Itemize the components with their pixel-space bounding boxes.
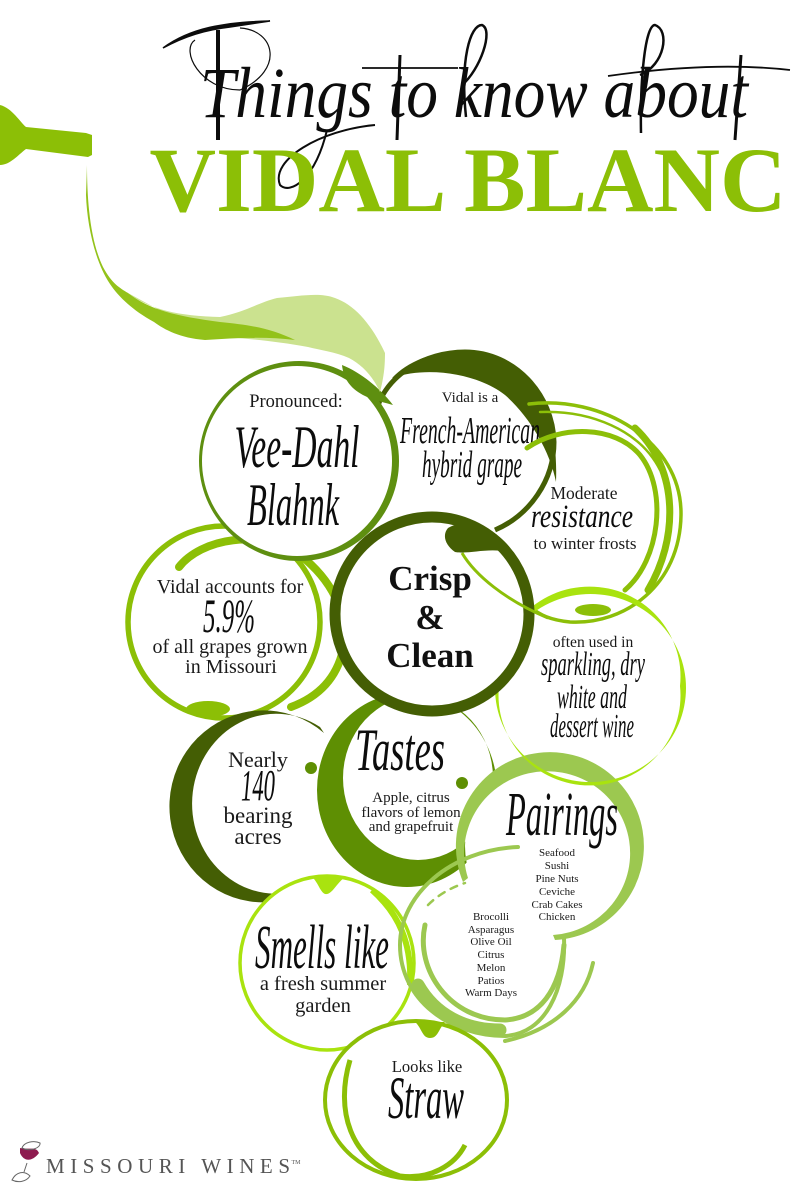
text: Asparagus (468, 924, 514, 936)
text: Sushi (545, 860, 569, 872)
panel: bearing acres (169, 710, 324, 902)
text: Pine Nuts (535, 873, 579, 885)
text: acres (234, 824, 282, 849)
panel: crisp and clean (335, 517, 548, 711)
ring arcs (527, 403, 681, 622)
outer arc (179, 540, 345, 707)
ring (169, 710, 324, 902)
text: and grapefruit (369, 819, 454, 835)
ring (495, 587, 686, 785)
panel: 5.9 percent (128, 526, 345, 718)
text: often used in (553, 634, 633, 651)
text (505, 781, 618, 923)
ring (335, 517, 529, 711)
text: Chicken (539, 911, 576, 923)
panel: winter resistance (527, 403, 681, 622)
text: Patios (478, 975, 504, 987)
text: Brocolli (473, 911, 509, 923)
text (465, 911, 517, 999)
text: Tastes (355, 717, 445, 783)
text: to winter frosts (534, 534, 636, 553)
text (386, 559, 474, 675)
title: VIDAL BLANC: VIDAL BLANC (150, 129, 786, 231)
text: Vidal is a (442, 390, 499, 406)
dots (305, 762, 468, 789)
panel: French-American hybrid (376, 351, 556, 530)
trademark: TM (292, 1160, 301, 1166)
text: 5.9% (203, 590, 255, 643)
ring crescent (317, 693, 497, 887)
drip blob (186, 701, 230, 717)
text: Citrus (478, 949, 504, 961)
text: Nearly (228, 747, 288, 772)
text: Melon (477, 962, 506, 974)
drip blob (312, 877, 345, 894)
text: & (415, 598, 445, 637)
text: Vidal accounts for (157, 576, 304, 598)
panel: smells like (240, 876, 414, 1050)
panel: pairings (456, 752, 644, 940)
text: dessert wine (550, 708, 634, 745)
text: a fresh summer (260, 973, 386, 995)
text: Smells like (255, 914, 389, 982)
text (355, 717, 461, 835)
text: Clean (386, 636, 474, 675)
wordmark: MISSOURI WINES (46, 1154, 290, 1178)
ring (240, 876, 414, 1050)
text: Looks like (392, 1057, 462, 1076)
text: Seafood (539, 847, 576, 859)
panel: wine uses (495, 587, 686, 785)
panel: brocolli pairings ring (400, 847, 593, 1041)
logo: Missouri Wines (12, 1142, 301, 1182)
text (541, 634, 645, 745)
text: resistance (531, 499, 633, 535)
drip blob (415, 1022, 445, 1038)
text: Apple, citrus (372, 790, 450, 806)
text: 140 (241, 761, 275, 810)
text: bearing (224, 803, 293, 828)
text: in Missouri (185, 656, 277, 678)
text: sparkling, dry (541, 646, 645, 683)
drip blob (445, 523, 515, 555)
text (399, 390, 540, 486)
text: Moderate (550, 483, 618, 503)
inner arc (344, 1060, 465, 1177)
text: flavors of lemon (361, 805, 461, 821)
text: Pairings (505, 781, 618, 849)
ring (456, 752, 644, 940)
ring (199, 361, 399, 561)
text: Olive Oil (470, 936, 512, 948)
text: Ceviche (539, 886, 575, 898)
text: Crab Cakes (531, 899, 583, 911)
icon: wine bottle (0, 105, 92, 165)
text (531, 483, 636, 553)
mask (317, 699, 499, 881)
icon: wine glass (12, 1142, 40, 1182)
text: Crisp (388, 559, 472, 598)
text (255, 914, 389, 1017)
text: garden (295, 995, 351, 1017)
title (150, 21, 790, 231)
text (234, 392, 360, 538)
ring strokes (400, 847, 593, 1041)
text: Warm Days (465, 987, 517, 999)
drip blob (575, 604, 611, 616)
panel: pronounced (199, 361, 399, 561)
panel: tastes (305, 693, 499, 887)
text: hybrid grape (422, 444, 522, 486)
text: white and (557, 679, 628, 716)
thin crossing arc (462, 553, 548, 618)
text (388, 1057, 464, 1131)
text: Straw (388, 1065, 464, 1131)
text (224, 747, 293, 849)
text: Pronounced: (249, 392, 343, 412)
text: French-American (399, 410, 540, 452)
text: of all grapes grown (153, 636, 307, 658)
text: Vee-Dahl (234, 414, 360, 480)
title script line (163, 21, 790, 188)
wine pour stream (86, 165, 385, 392)
text (153, 576, 307, 678)
ring thick side (372, 890, 410, 985)
text: Blahnk (247, 472, 340, 538)
ring (376, 351, 556, 530)
panel: looks like (325, 1021, 507, 1179)
drip blob (342, 365, 393, 405)
ring (325, 1021, 507, 1179)
mask (202, 364, 396, 558)
mask (465, 760, 637, 932)
ring (128, 526, 320, 718)
